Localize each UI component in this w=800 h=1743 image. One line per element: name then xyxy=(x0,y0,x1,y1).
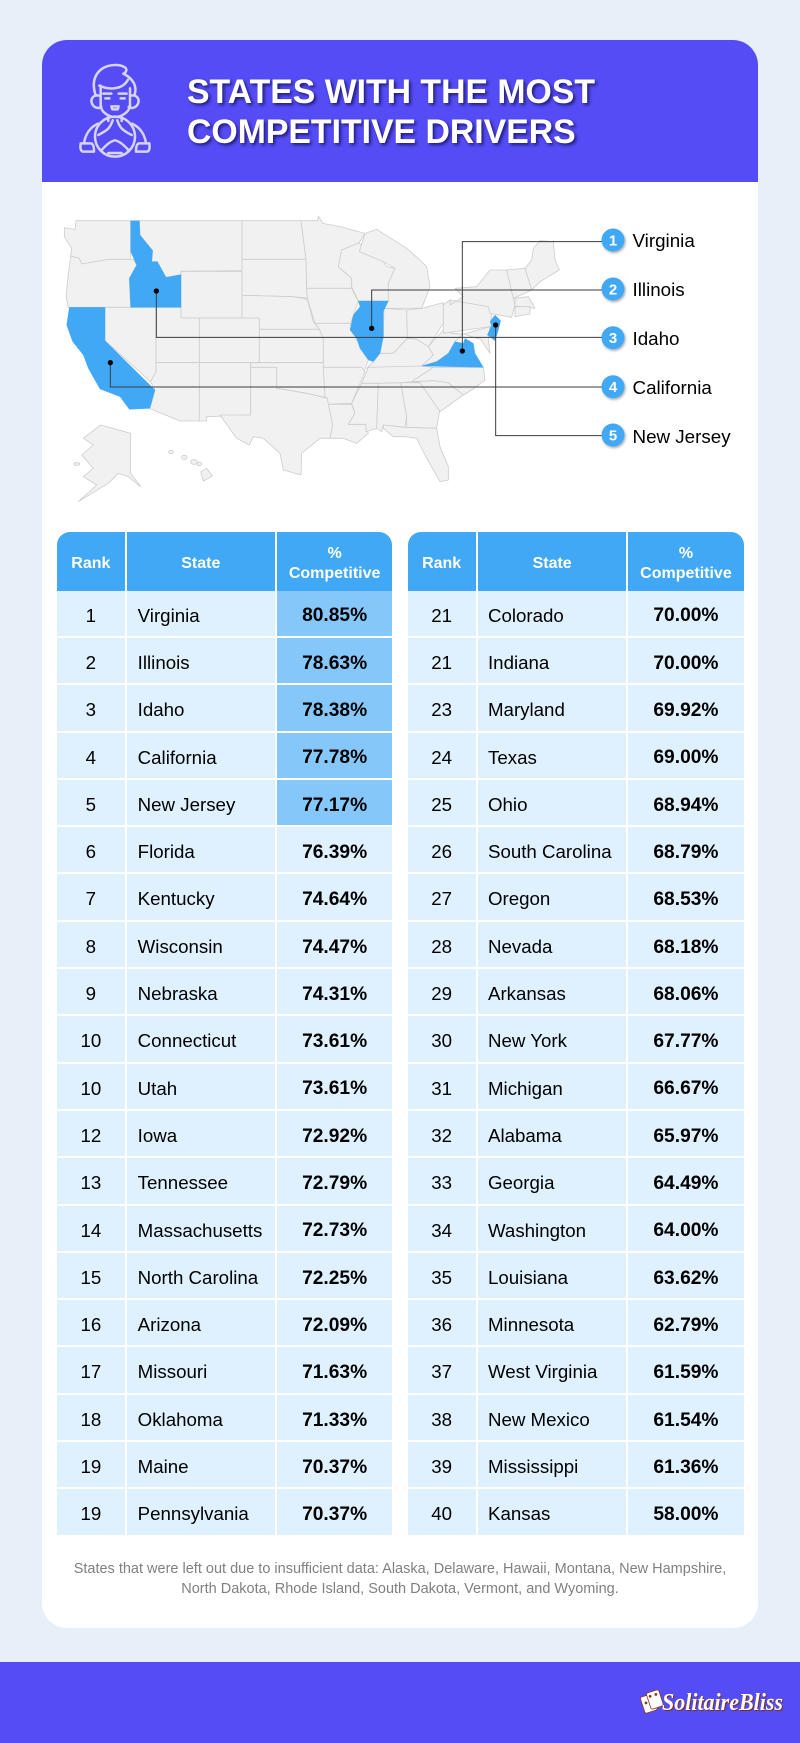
left table: ranks 1 to 19: 19 xyxy=(80,1503,101,1524)
left table: ranks 1 to 19: Tennessee xyxy=(138,1172,228,1193)
right table: ranks 21 to 40: 40 xyxy=(431,1503,452,1524)
right table: ranks 21 to 40: 31 xyxy=(431,1078,452,1099)
right table: ranks 21 to 40: 27 xyxy=(431,888,452,909)
right table: ranks 21 to 40: Louisiana xyxy=(488,1267,568,1288)
right table: ranks 21 to 40: 70.00% xyxy=(653,653,718,674)
left table: ranks 1 to 19: 13 xyxy=(80,1172,101,1193)
right table: ranks 21 to 40: 68.18% xyxy=(653,937,718,958)
right table: ranks 21 to 40: Oregon xyxy=(488,888,550,909)
left table: ranks 1 to 19: 10 xyxy=(80,1078,101,1099)
left table: ranks 1 to 19: Idaho xyxy=(138,699,184,720)
left table: ranks 1 to 19: Iowa xyxy=(138,1125,177,1146)
right table: ranks 21 to 40: 58.00% xyxy=(653,1504,718,1525)
legend: ranked states: 3 xyxy=(609,330,617,347)
right table: ranks 21 to 40: 68.06% xyxy=(653,984,718,1005)
right table: ranks 21 to 40: Mississippi xyxy=(488,1456,578,1477)
right table: ranks 21 to 40: 21 xyxy=(431,605,452,626)
legend: ranked states: California xyxy=(632,377,712,398)
right table: ranks 21 to 40: 61.54% xyxy=(653,1410,718,1431)
left table: ranks 1 to 19: 1 xyxy=(86,605,96,626)
legend: ranked states: 4 xyxy=(609,379,618,396)
left table: ranks 1 to 19: New Jersey xyxy=(138,794,235,815)
right table: ranks 21 to 40: 68.53% xyxy=(653,889,718,910)
right table: ranks 21 to 40: Nevada xyxy=(488,936,552,957)
title xyxy=(187,73,599,151)
right table: ranks 21 to 40: Minnesota xyxy=(488,1314,574,1335)
left table: ranks 1 to 19: 16 xyxy=(80,1314,101,1335)
right table: ranks 21 to 40: 38 xyxy=(431,1409,452,1430)
right table: ranks 21 to 40: 68.79% xyxy=(653,842,718,863)
footnote xyxy=(74,1560,726,1596)
left table: ranks 1 to 19: Florida xyxy=(138,841,195,862)
left table header: Rank xyxy=(71,555,110,572)
header band xyxy=(42,40,758,182)
left table: ranks 1 to 19: 70.37% xyxy=(302,1457,367,1478)
right table: ranks 21 to 40: Indiana xyxy=(488,652,549,673)
legend: ranked states: 1 xyxy=(609,232,617,250)
right table: ranks 21 to 40: Georgia xyxy=(488,1172,554,1193)
right table: ranks 21 to 40: Alabama xyxy=(488,1125,562,1146)
left table header xyxy=(57,532,392,591)
left table: ranks 1 to 19: 71.33% xyxy=(302,1410,367,1431)
left table: ranks 1 to 19: 8 xyxy=(86,936,96,957)
left table: ranks 1 to 19: North Carolina xyxy=(138,1267,258,1288)
left table: ranks 1 to 19: 5 xyxy=(86,794,96,815)
left table: ranks 1 to 19: Arizona xyxy=(138,1314,201,1335)
left table: ranks 1 to 19: 78.38% xyxy=(302,700,367,721)
left table: ranks 1 to 19: Nebraska xyxy=(138,983,218,1004)
right table: ranks 21 to 40: Maryland xyxy=(488,699,565,720)
legend: ranked states: 2 xyxy=(609,282,617,298)
left table: ranks 1 to 19: Connecticut xyxy=(138,1030,236,1051)
legend: ranked states: Virginia xyxy=(632,230,695,251)
left table: ranks 1 to 19: 72.25% xyxy=(302,1268,367,1289)
left table: ranks 1 to 19: Kentucky xyxy=(138,888,215,909)
footer band xyxy=(0,1662,800,1743)
legend: ranked states: New Jersey xyxy=(632,426,731,447)
left table: ranks 1 to 19: 12 xyxy=(80,1125,101,1146)
right table: ranks 21 to 40: 29 xyxy=(431,983,452,1004)
left table: ranks 1 to 19: 80.85% xyxy=(302,605,367,626)
left table: ranks 1 to 19: Wisconsin xyxy=(138,936,223,957)
right table header: Rank xyxy=(422,555,461,572)
right table: ranks 21 to 40: Ohio xyxy=(488,794,527,815)
left table: ranks 1 to 19: Maine xyxy=(138,1456,189,1477)
right table: ranks 21 to 40: 32 xyxy=(431,1125,452,1146)
legend: ranked states: 5 xyxy=(609,428,617,444)
left table: ranks 1 to 19: 14 xyxy=(80,1220,101,1241)
left table: ranks 1 to 19: 73.61% xyxy=(302,1078,367,1099)
right table: ranks 21 to 40: 35 xyxy=(431,1267,452,1288)
footnote: North Dakota, Rhode Island, South Dakota, Vermont, and Wyoming. xyxy=(181,1580,619,1596)
left table: ranks 1 to 19: 71.63% xyxy=(302,1362,367,1383)
right table: ranks 21 to 40: New Mexico xyxy=(488,1409,590,1430)
right table: ranks 21 to 40: 26 xyxy=(431,841,452,862)
left table: ranks 1 to 19: 72.09% xyxy=(302,1315,367,1336)
legend: ranked states: Idaho xyxy=(632,328,680,349)
left table: ranks 1 to 19: California xyxy=(138,747,217,768)
right table: ranks 21 to 40: 21 xyxy=(431,652,452,673)
footnote: States that were left out due to insufficient data: Alaska, Delaware, Hawaii, Montana, New Hampshire, xyxy=(74,1560,726,1576)
left table header: Competitive xyxy=(289,565,380,582)
right table: ranks 21 to 40: 63.62% xyxy=(653,1268,718,1289)
right table: ranks 21 to 40: Kansas xyxy=(488,1503,550,1524)
right table: ranks 21 to 40: New York xyxy=(488,1030,567,1051)
right table: ranks 21 to 40: 34 xyxy=(431,1220,452,1241)
left table: ranks 1 to 19: 77.17% xyxy=(302,795,367,816)
right table: ranks 21 to 40: 64.49% xyxy=(653,1173,718,1194)
left table: ranks 1 to 19: 18 xyxy=(80,1409,101,1430)
legend: ranked states xyxy=(602,228,731,447)
left table header: % xyxy=(328,545,342,562)
right table: ranks 21 to 40: 28 xyxy=(431,936,452,957)
right table: ranks 21 to 40: Michigan xyxy=(488,1078,563,1099)
left table: ranks 1 to 19: 19 xyxy=(80,1456,101,1477)
left table: ranks 1 to 19: 4 xyxy=(86,747,96,768)
right table header: State xyxy=(533,555,572,572)
right table: ranks 21 to 40: 66.67% xyxy=(653,1078,718,1099)
left table: ranks 1 to 19: 74.64% xyxy=(302,889,367,910)
left table: ranks 1 to 19: Illinois xyxy=(138,652,190,673)
left table header: State xyxy=(181,555,220,572)
left table: ranks 1 to 19: Utah xyxy=(138,1078,177,1099)
right table: ranks 21 to 40: Colorado xyxy=(488,605,564,626)
left table: ranks 1 to 19: Pennsylvania xyxy=(138,1503,249,1524)
left table: ranks 1 to 19: 77.78% xyxy=(302,747,367,768)
right table: ranks 21 to 40: 69.00% xyxy=(653,747,718,768)
right table: ranks 21 to 40: 65.97% xyxy=(653,1126,718,1147)
left table: ranks 1 to 19: 9 xyxy=(86,983,96,1004)
right table: ranks 21 to 40: 70.00% xyxy=(653,605,718,626)
left table: ranks 1 to 19: Virginia xyxy=(138,605,200,626)
right table: ranks 21 to 40: 30 xyxy=(431,1030,452,1051)
left table: ranks 1 to 19: 74.47% xyxy=(302,937,367,958)
right table: ranks 21 to 40: 61.59% xyxy=(653,1362,718,1383)
right table: ranks 21 to 40: 37 xyxy=(431,1361,452,1382)
right table: ranks 21 to 40: Washington xyxy=(488,1220,586,1241)
right table: ranks 21 to 40: 39 xyxy=(431,1456,452,1477)
left table: ranks 1 to 19: 70.37% xyxy=(302,1504,367,1525)
right table: ranks 21 to 40: 24 xyxy=(431,747,452,768)
left table: ranks 1 to 19: 17 xyxy=(80,1361,101,1382)
left table: ranks 1 to 19: 72.79% xyxy=(302,1173,367,1194)
left table: ranks 1 to 19: 3 xyxy=(86,699,96,720)
map: United States with leader lines xyxy=(64,216,731,502)
left table: ranks 1 to 19: Oklahoma xyxy=(138,1409,223,1430)
left table: ranks 1 to 19: 7 xyxy=(86,888,96,909)
right table: ranks 21 to 40: Texas xyxy=(488,747,537,768)
left table: ranks 1 to 19: 73.61% xyxy=(302,1031,367,1052)
left table: ranks 1 to 19: 2 xyxy=(86,652,96,673)
right table: ranks 21 to 40 xyxy=(408,532,744,1535)
right table: ranks 21 to 40: 36 xyxy=(431,1314,452,1335)
icon: driver at steering wheel xyxy=(79,64,151,158)
left table: ranks 1 to 19 xyxy=(57,532,392,1535)
title: COMPETITIVE DRIVERS xyxy=(187,113,576,151)
right table: ranks 21 to 40: 69.92% xyxy=(653,700,718,721)
legend: ranked states: Illinois xyxy=(632,279,685,300)
right table: ranks 21 to 40: West Virginia xyxy=(488,1361,597,1382)
right table: ranks 21 to 40: 25 xyxy=(431,794,452,815)
right table: ranks 21 to 40: 23 xyxy=(431,699,452,720)
right table header xyxy=(408,532,744,591)
right table: ranks 21 to 40: 68.94% xyxy=(653,795,718,816)
right table: ranks 21 to 40: 33 xyxy=(431,1172,452,1193)
right table: ranks 21 to 40: 67.77% xyxy=(653,1031,718,1052)
left table: ranks 1 to 19: 10 xyxy=(80,1030,101,1051)
left table: ranks 1 to 19: 78.63% xyxy=(302,653,367,674)
right table: ranks 21 to 40: 64.00% xyxy=(653,1220,718,1241)
left table: ranks 1 to 19: 72.92% xyxy=(302,1126,367,1147)
right table: ranks 21 to 40: South Carolina xyxy=(488,841,612,862)
right table header: % xyxy=(679,545,693,562)
left table: ranks 1 to 19: Missouri xyxy=(138,1361,207,1382)
left table: ranks 1 to 19: 15 xyxy=(80,1267,101,1288)
left table: ranks 1 to 19: 72.73% xyxy=(302,1220,367,1241)
left table: ranks 1 to 19: 6 xyxy=(86,841,96,862)
left table: ranks 1 to 19: 76.39% xyxy=(302,842,367,863)
right table: ranks 21 to 40: 62.79% xyxy=(653,1315,718,1336)
left table: ranks 1 to 19: Massachusetts xyxy=(138,1220,262,1241)
right table header: Competitive xyxy=(640,565,732,582)
left table: ranks 1 to 19: 74.31% xyxy=(302,984,367,1005)
title: STATES WITH THE MOST xyxy=(187,73,595,111)
right table: ranks 21 to 40: 61.36% xyxy=(653,1457,718,1478)
right table: ranks 21 to 40: Arkansas xyxy=(488,983,566,1004)
